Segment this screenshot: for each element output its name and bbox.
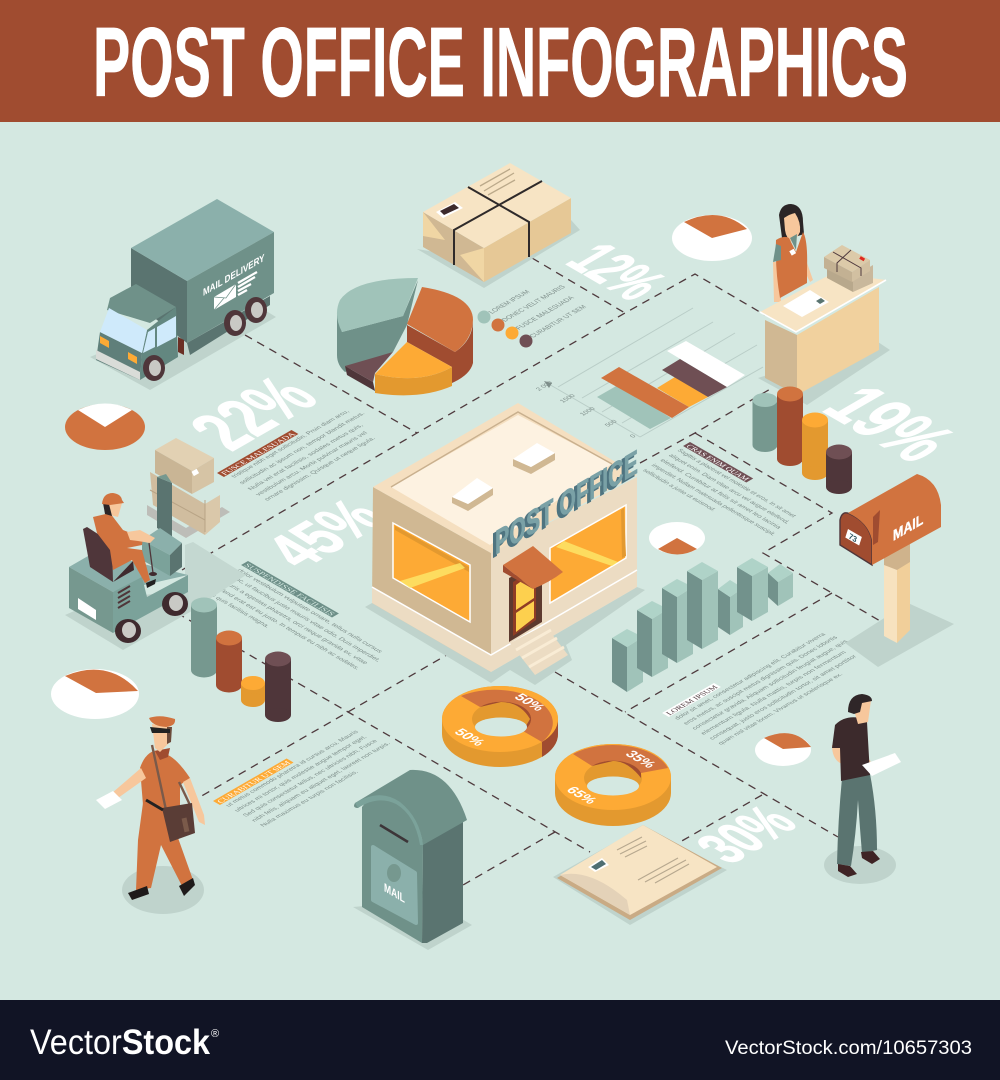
head and cap <box>149 716 175 752</box>
parcel <box>417 163 580 288</box>
pie legend: CURABITUR UT SEM <box>529 304 589 339</box>
text block: fusce malesuada: FUSCE MALESUADA <box>219 431 298 477</box>
pallet of boxes <box>147 438 230 538</box>
cylinder chart left <box>191 598 291 722</box>
donut chart 1 <box>442 686 558 767</box>
truck lettering: MAIL DELIVERY <box>203 252 265 299</box>
shoes <box>838 851 880 877</box>
truck wheels <box>143 297 267 381</box>
arm <box>832 745 872 768</box>
3d bar chart <box>612 558 793 692</box>
man reading letter <box>824 694 901 884</box>
post office sign: POST OFFICE <box>495 442 638 563</box>
trousers <box>837 774 877 866</box>
pie legend: FUSCE MALESUADA <box>515 295 576 331</box>
envelope stamp <box>588 858 609 872</box>
footer url: VectorStock.com/10657303 <box>725 1038 972 1059</box>
shoes <box>128 878 195 900</box>
text block: curabitur ut sem: ut metus commodo pharetra id cursus arcu. Mauris <box>224 729 360 808</box>
mini pie 1 <box>65 404 145 450</box>
legs <box>136 803 193 890</box>
bar chart on floor: 0 <box>629 433 638 439</box>
text block: fusce malesuada <box>217 400 394 503</box>
roof <box>373 403 637 553</box>
text block: cras enim quam: sollicitudin a justo ut euismod. <box>641 468 718 513</box>
text block: lorem ipsum: elementum ligula. Nulla mattis, turpis non fermentum <box>699 650 848 736</box>
footer bar <box>0 1000 1000 1080</box>
text block: curabitur ut sem: nibh felis, aliquam eu aliquet eget, laoreet non turpis. <box>250 741 393 823</box>
arms <box>112 768 205 825</box>
mini pie 5 <box>755 733 811 766</box>
text block: cras enim quam: aliquet enim. Diam vitae arcu vel augue eleifend, <box>667 453 792 525</box>
cylinder chart right <box>752 386 852 494</box>
truck cab <box>96 284 178 380</box>
mailbox post <box>884 540 910 643</box>
text block: curabitur ut sem: Sed quis consectetur tellus, nec ultricies nibh. Fusce <box>242 738 380 818</box>
left window <box>393 523 470 622</box>
text block: lorem ipsum: consectetur gravida. Aliquam sollicitudin feugiat augue, quis <box>691 639 850 731</box>
bar chart on floor: 2 000 <box>535 380 555 392</box>
mini pie 4 <box>51 669 139 719</box>
mini pie 2 <box>672 215 752 261</box>
text block: lorem ipsum: eros metus, ac suscipit metus dignissim quis. Donec lobortis <box>682 635 840 726</box>
donut chart 2: 65% <box>563 784 602 806</box>
text block: suspendisse facilisis: nunc, ut faucibus justo mauris vitae odio. Duis imperdiet, <box>226 573 382 663</box>
parcel strings <box>454 181 542 265</box>
percent 45: 45% <box>249 489 402 578</box>
text block: cras enim quam: CRAS ENIM QUAM <box>684 443 752 482</box>
panel on box <box>373 847 416 923</box>
bar chart on floor: 1500 <box>559 393 578 404</box>
text block: fusce malesuada: sollicitudin ac ipsum non, tempor blandit metus. <box>238 411 367 486</box>
text block: cras enim quam <box>640 442 813 542</box>
delivery truck <box>90 199 276 390</box>
bag and strap <box>152 745 195 842</box>
shirt <box>832 717 870 781</box>
counter with clerk <box>758 204 890 405</box>
donut chart 2 <box>555 744 671 826</box>
text block: suspendisse facilisis: Duis quis facilisis magna. <box>200 588 272 629</box>
parcel stamp <box>436 202 463 218</box>
forklift wheels <box>115 592 188 643</box>
mailbox number plate: 73 <box>848 531 858 545</box>
right window <box>550 505 626 603</box>
footer logo: VectorStock <box>30 1023 210 1062</box>
pie legend: LOREM IPSUM <box>488 289 532 315</box>
parcels on counter <box>824 245 873 292</box>
circle on box <box>387 864 401 882</box>
donut labels: 50% <box>511 691 550 713</box>
belt <box>146 800 163 810</box>
steps <box>510 625 568 675</box>
dashed connector lines <box>177 258 882 885</box>
post office sign <box>492 442 638 566</box>
text block: cras enim quam: Sagittis a placerat vel molestie et eros. In sit amet <box>675 448 798 519</box>
percent 30: 30% <box>682 797 811 872</box>
text block: suspendisse facilisis <box>198 561 401 678</box>
forklift mast <box>157 474 172 537</box>
text block: curabitur ut sem: ultrices mi tortor, quis molestie augue tempor eget. <box>233 734 369 813</box>
mailbox number plate <box>845 529 862 547</box>
3d pie chart <box>337 278 473 395</box>
forklift seat <box>83 527 134 582</box>
text block: fusce malesuada: Nulla vel erat facilisis, sodales metus quis, <box>246 423 365 492</box>
text block: lorem ipsum: dolor sit amet, consectetur adipiscing elit. Curabitur viverra <box>673 632 828 721</box>
envelope logo <box>214 272 257 310</box>
bar chart on floor: 500 <box>604 419 619 428</box>
door <box>509 562 542 642</box>
letter in hand <box>96 791 122 809</box>
text block: fusce malesuada: tristique nibh eget sollicitudin. Proin diam arcu, <box>230 409 351 479</box>
skylight 2 <box>513 443 555 474</box>
text block: suspendisse facilisis: dolor vestibulum vulputate ornare, tellus nulla cursus <box>235 568 384 654</box>
post office sign: POST OFFICE <box>492 445 635 566</box>
shirt <box>140 750 190 812</box>
envelope <box>553 825 727 925</box>
text block: lorem ipsum: quam nisl vitae lorem. Vivamus ut scelerisque ex. <box>717 672 845 746</box>
letter in hands <box>862 753 901 776</box>
text block: curabitur ut sem <box>213 721 401 830</box>
skylight 1 <box>452 478 493 511</box>
mailbox label: MAIL <box>893 510 923 545</box>
awning <box>503 546 563 589</box>
postman <box>96 716 205 914</box>
roadside mailbox <box>840 474 954 667</box>
text block: cras enim quam: eleifend. Curabitur at felis sit amet leo lacinia <box>658 458 783 530</box>
text block: lorem ipsum: consequat, justo eros sollicitudin tortor, sit amet porttitor <box>708 654 859 741</box>
mail slot <box>380 825 408 842</box>
text block: suspendisse facilisis: eleifend erat est eu justo. In tempus eu nibh ac sodales. <box>209 583 362 671</box>
donut chart 1: 50% <box>451 726 490 748</box>
text block: suspendisse facilisis: SUSPENDISSE FACILISIS <box>242 562 337 617</box>
mini pie 3 <box>649 522 705 554</box>
letter on counter <box>783 290 829 317</box>
donut labels: 35% <box>622 748 661 770</box>
post office building <box>365 403 645 685</box>
text block: lorem ipsum <box>662 623 876 747</box>
text block: fusce malesuada: vestibulum arcu. Morbi pulvinar mauris vel <box>254 430 369 497</box>
header banner <box>0 0 1000 122</box>
street mail box <box>353 770 472 950</box>
text block: lorem ipsum: LOREM IPSUM <box>664 684 720 717</box>
forklift with driver <box>65 474 246 650</box>
bar chart on floor: 1000 <box>579 406 598 417</box>
pie legend: DONEC VELIT MAURIS <box>501 284 568 323</box>
percent 22: 22% <box>172 366 336 461</box>
bar chart on floor <box>535 308 763 439</box>
head <box>848 694 872 724</box>
text block: suspendisse facilisis: mauris a egestas pharetra, orci neque gravida ex, vitae <box>218 578 370 666</box>
clerk <box>773 204 813 302</box>
percent 12: 12% <box>552 234 682 309</box>
driver <box>93 493 157 588</box>
text block: fusce malesuada: ornare dignissim. Quisque ut neque ligula. <box>263 436 377 502</box>
mail label: MAIL <box>384 880 405 906</box>
text block: curabitur ut sem: Nulla maximus eu turpis non facilisis. <box>259 769 360 828</box>
text block: curabitur ut sem: CURABITUR UT SEM <box>215 759 293 805</box>
pie legend <box>478 284 589 348</box>
registered mark: ® <box>211 1028 219 1040</box>
text block: cras enim quam: imperdiet. Nullam malesuada pellentesque suscipit. <box>649 463 778 537</box>
